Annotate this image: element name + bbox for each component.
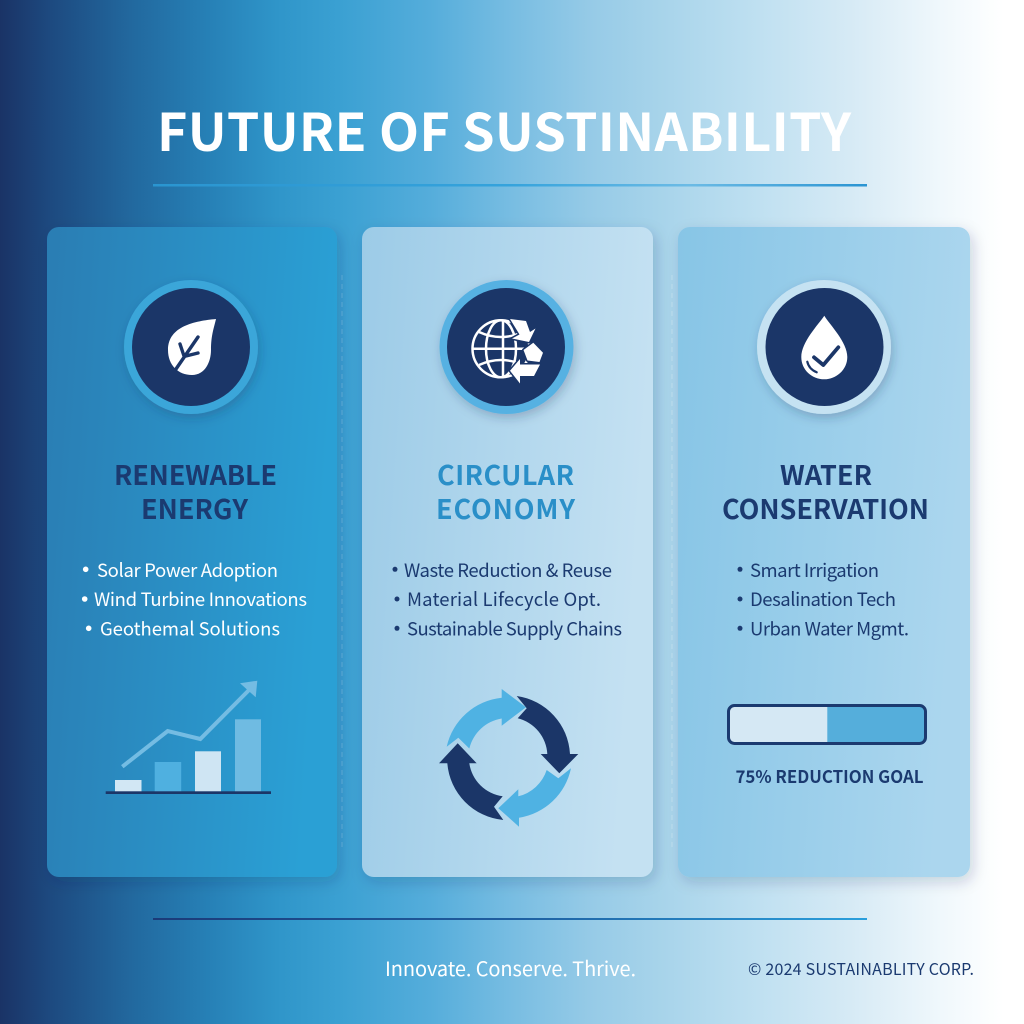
icon: globe with recycling arrows	[440, 280, 574, 414]
bar chart with rising arrow	[106, 681, 271, 794]
footer copyright: © 2024 SUSTAINABLITY CORP.	[748, 956, 974, 980]
panel: circular economy	[362, 227, 653, 877]
icon: leaf	[124, 280, 258, 414]
title: FUTURE OF SUSTINABILITY	[157, 91, 852, 166]
heading: WATER	[780, 454, 872, 493]
card background	[47, 227, 337, 877]
heading: ECONOMY	[436, 488, 575, 527]
heading	[722, 454, 929, 527]
heading: CONSERVATION	[722, 488, 929, 527]
bullet list: Desalination Tech	[750, 586, 896, 612]
bullet list: Smart Irrigation	[750, 557, 879, 583]
footer tagline: Innovate. Conserve. Thrive.	[385, 953, 636, 982]
progress bar	[728, 706, 926, 744]
bullet list: Geothemal Solutions	[100, 616, 280, 642]
bullet list	[738, 557, 909, 642]
bullet list	[392, 557, 622, 642]
bullet list: Material Lifecycle Opt.	[407, 586, 601, 612]
bullet list: Waste Reduction & Reuse	[404, 557, 612, 583]
heading: CIRCULAR	[437, 454, 574, 493]
heading	[436, 454, 575, 527]
icon: circular arrows	[439, 689, 578, 827]
heading	[114, 454, 277, 527]
progress label: 75% REDUCTION GOAL	[736, 764, 924, 789]
bullet list: Wind Turbine Innovations	[94, 586, 307, 612]
card background	[678, 227, 970, 877]
panel: renewable energy	[47, 227, 337, 877]
heading: ENERGY	[141, 488, 248, 527]
bullet list: Urban Water Mgmt.	[750, 616, 909, 642]
card background	[362, 227, 653, 877]
bullet list: Solar Power Adoption	[97, 557, 278, 583]
bullet list	[82, 557, 307, 642]
panel: water conservation	[678, 227, 970, 877]
icon: water drop with check	[757, 280, 891, 414]
heading: RENEWABLE	[114, 454, 277, 493]
bullet list: Sustainable Supply Chains	[407, 616, 622, 642]
